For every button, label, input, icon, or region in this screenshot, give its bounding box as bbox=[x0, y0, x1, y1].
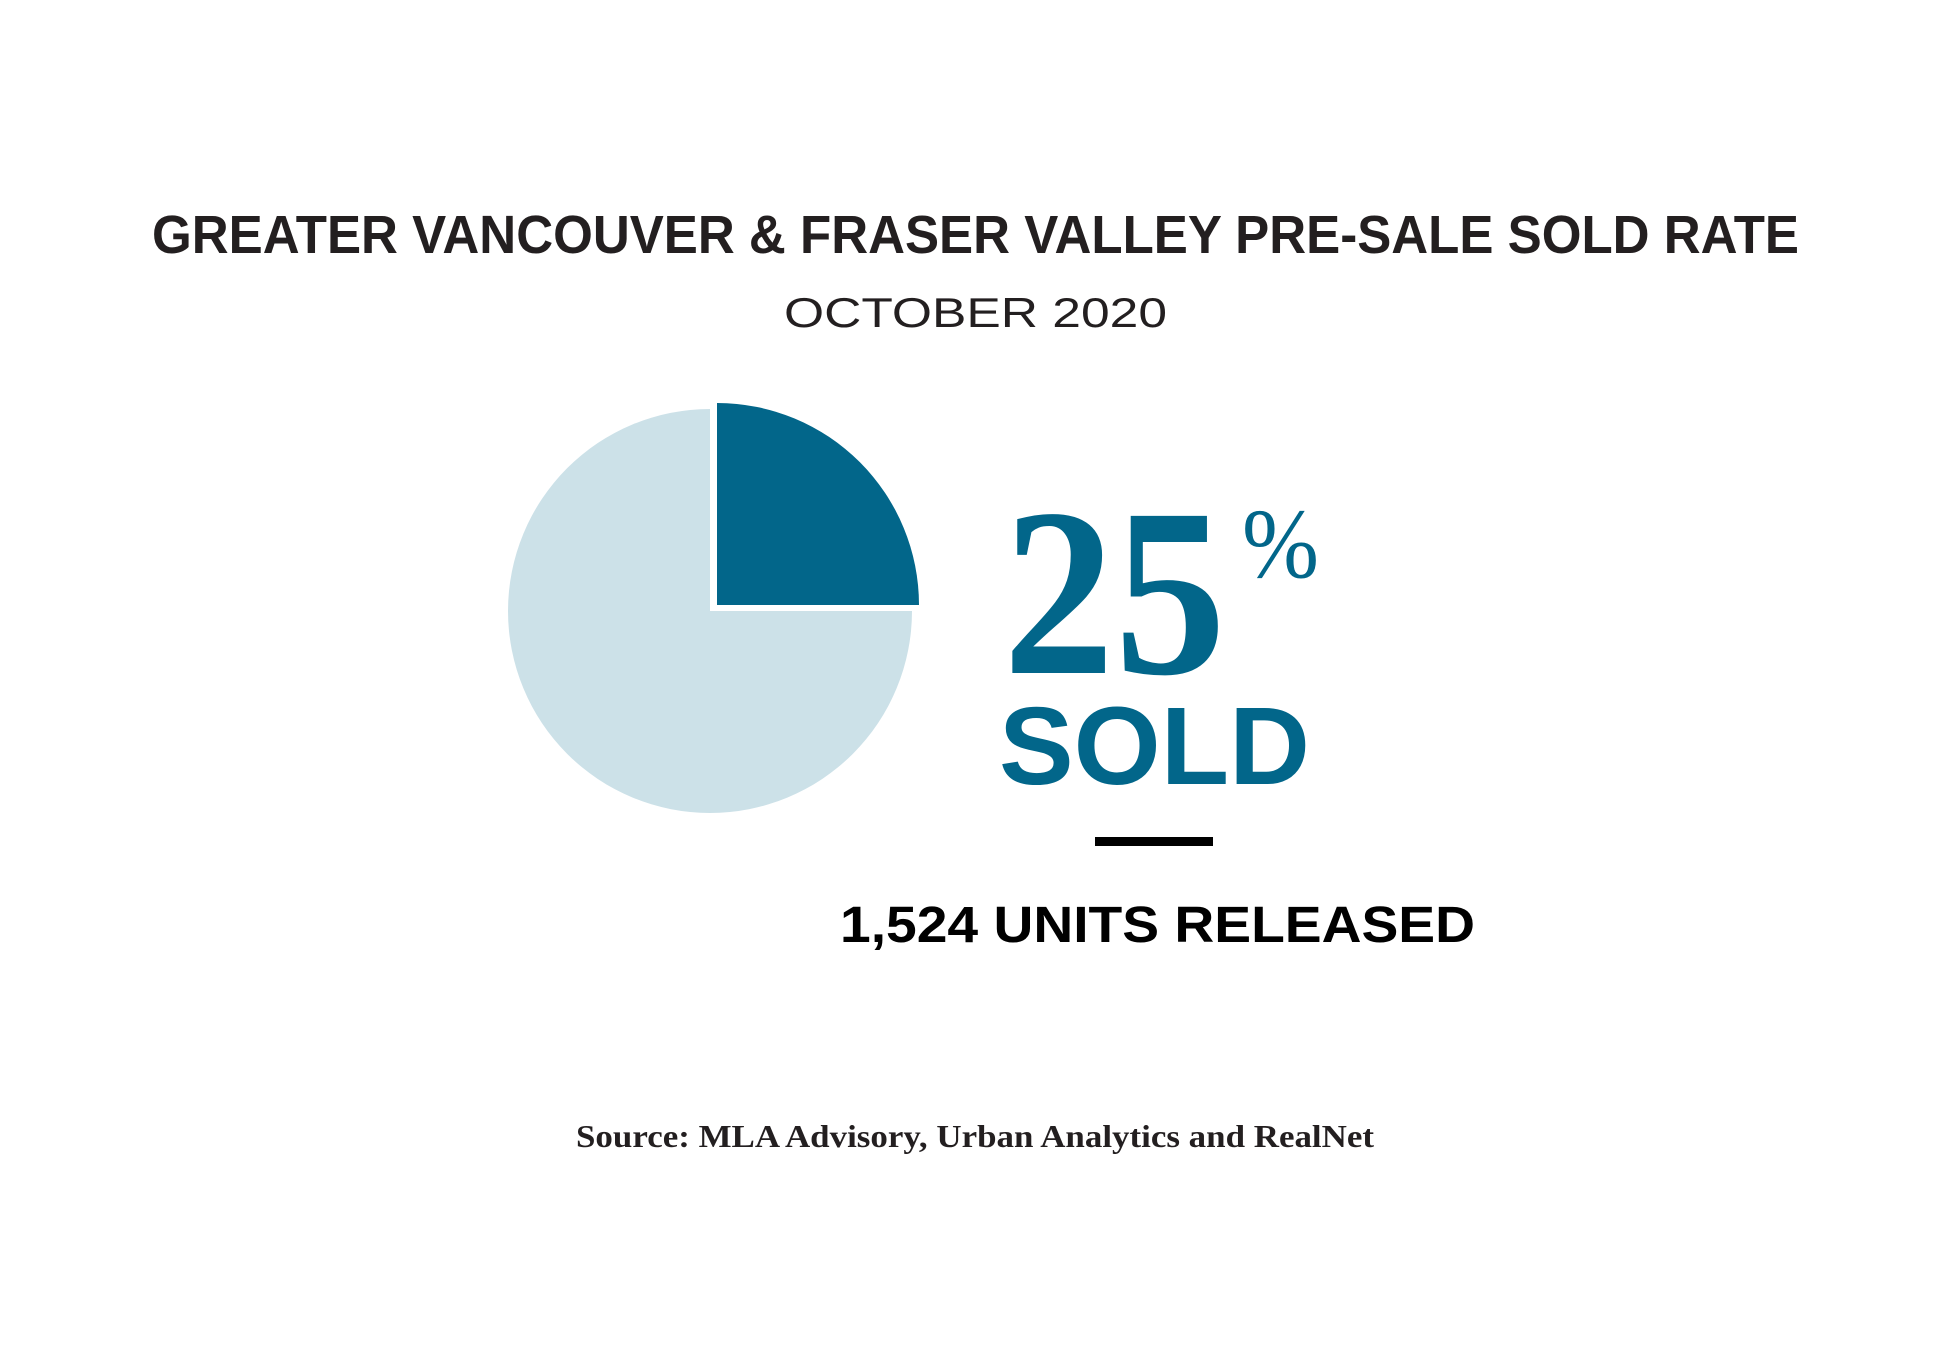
pie chart bbox=[508, 403, 919, 813]
big number 25: 25 bbox=[1003, 459, 1226, 725]
pie: unsold slice bbox=[508, 409, 912, 813]
title: GREATER VANCOUVER & FRASER VALLEY PRE-SALE SOLD RATE bbox=[152, 205, 1799, 265]
divider line bbox=[1095, 837, 1213, 846]
percent sign: % bbox=[1242, 488, 1319, 599]
source: Source: MLA Advisory, Urban Analytics and RealNet bbox=[576, 1118, 1374, 1154]
units released: 1,524 UNITS RELEASED bbox=[840, 896, 1475, 953]
pie: sold slice bbox=[717, 403, 919, 605]
SOLD label: SOLD bbox=[999, 685, 1310, 808]
subtitle: OCTOBER 2020 bbox=[784, 289, 1167, 336]
